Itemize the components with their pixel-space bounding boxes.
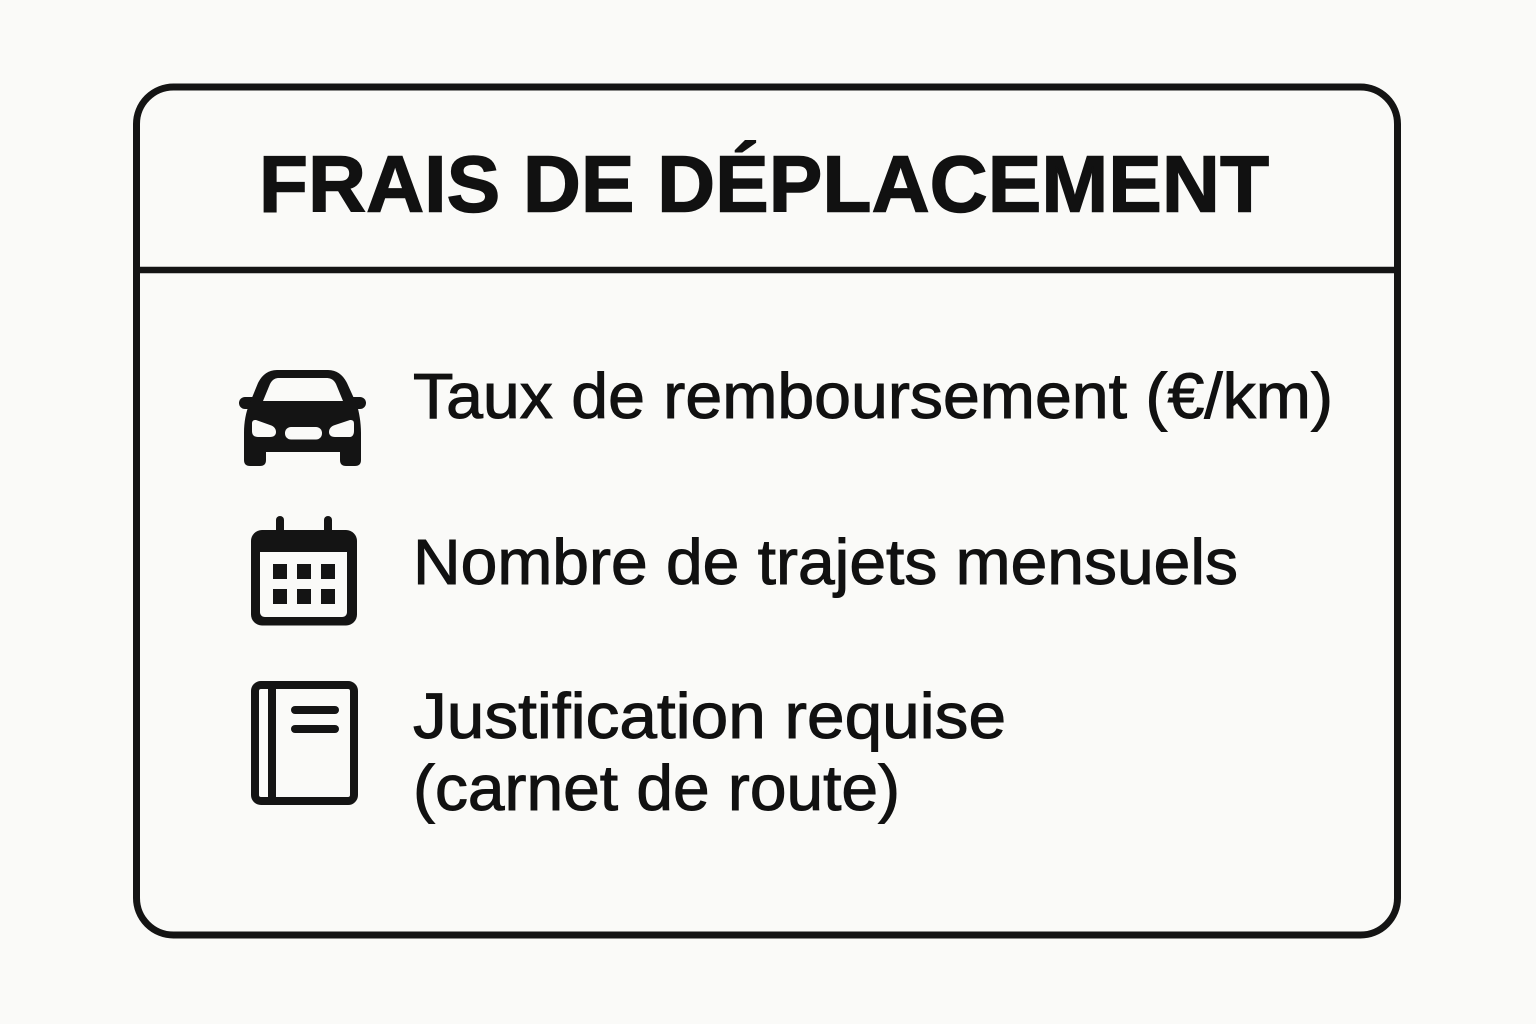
item text: carnet de route: (carnet de route) bbox=[413, 752, 900, 824]
panel: card frame bbox=[136, 87, 1398, 935]
item text: nombre de trajets: Nombre de trajets mensuels bbox=[413, 526, 1238, 598]
icon: car bbox=[239, 370, 366, 466]
icon: logbook bbox=[255, 683, 354, 803]
item text: justification requise: Justification requise bbox=[413, 680, 1006, 752]
title: FRAIS DE DÉPLACEMENT bbox=[259, 140, 1269, 228]
icon: calendar bbox=[251, 520, 357, 626]
item text: taux de remboursement: Taux de remboursement (€/km) bbox=[413, 360, 1333, 432]
